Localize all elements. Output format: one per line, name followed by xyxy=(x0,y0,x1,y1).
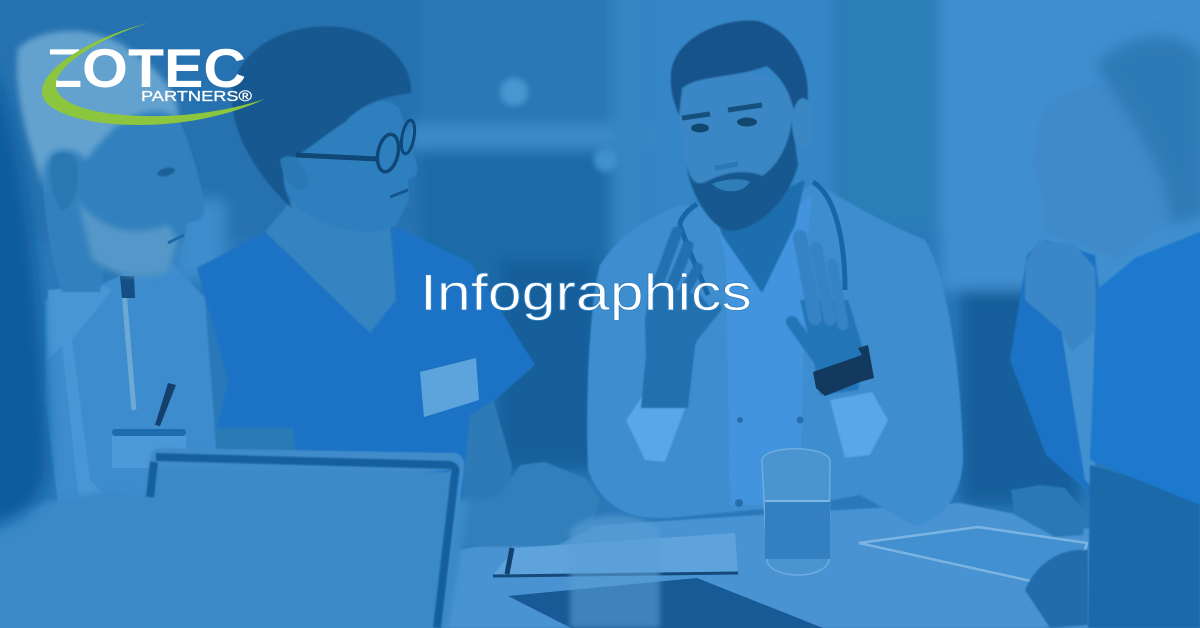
nose shadow xyxy=(715,164,738,168)
head xyxy=(279,99,417,231)
right cuff xyxy=(830,392,888,458)
table surface xyxy=(440,503,1095,628)
mouth xyxy=(712,179,750,191)
shirt xyxy=(712,195,812,505)
dark tablet xyxy=(508,578,823,628)
ear xyxy=(280,156,310,190)
left hand xyxy=(641,232,716,408)
person: nurse at right xyxy=(1010,36,1200,537)
mouth xyxy=(390,190,408,197)
forearm xyxy=(1088,465,1200,628)
ear xyxy=(792,98,814,148)
pen xyxy=(155,383,176,426)
laptop outer frame xyxy=(147,448,464,628)
water glass xyxy=(762,449,830,575)
title: Infographics xyxy=(420,264,752,321)
laptop bezel xyxy=(150,457,455,628)
badge xyxy=(112,429,186,468)
blurred shoulder xyxy=(0,490,470,628)
neck xyxy=(708,180,805,293)
hand on table xyxy=(1011,485,1087,537)
hair xyxy=(671,21,808,118)
eyes xyxy=(691,118,757,132)
table items xyxy=(493,449,1087,628)
neck xyxy=(265,190,398,335)
blurred dark shoulder xyxy=(0,50,48,530)
scrub top xyxy=(1010,240,1100,495)
hand xyxy=(1025,550,1088,628)
hair xyxy=(232,26,411,208)
logo subtitle: PARTNERS® xyxy=(141,88,252,105)
face xyxy=(42,84,204,292)
logo: Zotec Partners xyxy=(42,23,265,125)
laptop screen xyxy=(140,470,452,628)
brows xyxy=(682,105,762,118)
grey hair xyxy=(17,31,178,200)
stethoscope clip xyxy=(120,276,135,298)
head xyxy=(680,73,797,229)
left cuff xyxy=(626,385,690,462)
right hand xyxy=(792,237,865,395)
notebook band xyxy=(507,548,512,574)
forearm xyxy=(215,428,300,450)
beard xyxy=(686,120,798,231)
foreground figure at right edge xyxy=(1025,230,1200,628)
stethoscope tube xyxy=(124,290,134,410)
blurred nurse hair xyxy=(1095,36,1200,225)
mouth xyxy=(168,235,184,243)
person: central bearded doctor xyxy=(587,21,963,526)
eye xyxy=(156,166,176,178)
stethoscope xyxy=(680,182,845,295)
blurred foreground glass xyxy=(570,515,660,628)
clasped hand xyxy=(452,462,600,547)
stubble beard xyxy=(78,200,178,277)
lab coat xyxy=(587,182,963,526)
scrub top xyxy=(197,225,535,500)
notebook xyxy=(493,533,738,575)
hand at chin xyxy=(1025,240,1097,352)
glasses xyxy=(296,119,417,174)
coat collar xyxy=(48,285,118,510)
logo swoosh xyxy=(42,23,265,125)
foreground laptop and blurred shoulder xyxy=(0,50,470,628)
person: young doctor in scrubs xyxy=(197,26,600,547)
logo wordmark: ZOTEC xyxy=(46,37,246,99)
ear xyxy=(50,153,78,210)
person: left senior doctor xyxy=(17,31,216,520)
scrub top xyxy=(1090,230,1200,505)
coat buttons xyxy=(735,416,804,507)
notebook edge xyxy=(493,573,738,576)
name badge xyxy=(420,358,479,417)
tablet with chart xyxy=(859,527,1087,581)
blurred nurse face xyxy=(1030,81,1200,260)
white coat xyxy=(45,255,216,520)
watch xyxy=(813,345,874,396)
arm xyxy=(1062,330,1095,490)
